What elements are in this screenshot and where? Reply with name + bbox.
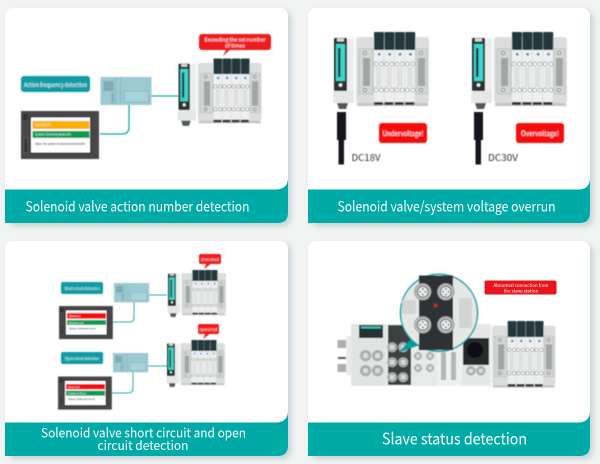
title band: voltage overrun bbox=[308, 178, 590, 223]
diagram: overvoltage device: Overvoltage! bbox=[521, 129, 559, 139]
diagram: action frequency system: Status: The number of actions exceeds the limit bbox=[35, 142, 85, 146]
diagram: short circuit detection: Register unit bbox=[69, 321, 84, 325]
diagram: action frequency system bbox=[21, 34, 271, 159]
diagram: short circuit detection: Status: Solenoid circuit bbox=[69, 326, 96, 330]
title band: action number detection: Solenoid valve action number detection bbox=[26, 196, 250, 216]
diagram: action frequency system: of times bbox=[225, 42, 245, 50]
red label: abnormal connection: the slave station bbox=[504, 288, 539, 294]
diagram: short circuit detection: short circuit bbox=[201, 257, 219, 263]
title band: short and open circuit bbox=[5, 411, 288, 456]
title band: short and open circuit: circuit detection bbox=[98, 435, 188, 454]
title band: voltage overrun: Solenoid valve/system voltage overrun bbox=[338, 196, 556, 216]
diagram: short circuit detection bbox=[59, 254, 226, 339]
diagram: overvoltage device bbox=[471, 32, 567, 164]
panel: voltage overrun bbox=[308, 8, 590, 223]
diagram: action frequency system: Self-fluid bit bbox=[35, 123, 51, 127]
title band: action number detection bbox=[5, 178, 288, 223]
panel: slave status detection bbox=[308, 241, 590, 456]
red label: abnormal connection: Abnormal connection from bbox=[494, 282, 548, 289]
diagram: short circuit detection: Short circuit detection bbox=[64, 286, 100, 292]
diagram: open circuit detection: Open circuit detection bbox=[65, 356, 99, 362]
diagram: open circuit detection: Status: Solenoid circuit bbox=[68, 397, 95, 401]
diagram: undervoltage device: Undervoltage! bbox=[382, 129, 424, 139]
title band: short and open circuit: Solenoid valve short circuit and open bbox=[41, 422, 246, 442]
panel: short and open circuit detection bbox=[5, 241, 288, 456]
diagram: open circuit detection bbox=[58, 324, 225, 410]
diagram: open circuit detection: Feedback Point bbox=[68, 392, 86, 396]
diagram: short circuit detection: Abnormal bbox=[69, 314, 81, 318]
diagram: action frequency system: System: Decrease peak unit bbox=[35, 132, 71, 136]
diagram: open circuit detection: Abnormal bbox=[68, 385, 80, 389]
diagram: undervoltage device bbox=[333, 32, 429, 164]
diagram: action frequency system: Exceeding the set number bbox=[204, 36, 266, 44]
diagram: action frequency system: Action frequency detection bbox=[24, 80, 87, 89]
title band: slave status bbox=[308, 411, 590, 456]
panel: action number detection bbox=[5, 8, 288, 223]
title band: slave status: Slave status detection bbox=[382, 426, 527, 450]
diagram: overvoltage device: DC30V bbox=[488, 150, 519, 164]
red label: abnormal connection bbox=[484, 280, 556, 294]
diagram: undervoltage device: DC18V bbox=[352, 150, 381, 164]
diagram: open circuit detection: open circuit bbox=[200, 327, 218, 333]
magnifier callout bbox=[399, 274, 478, 352]
diagram: slave modules and valve bank bbox=[338, 321, 556, 388]
